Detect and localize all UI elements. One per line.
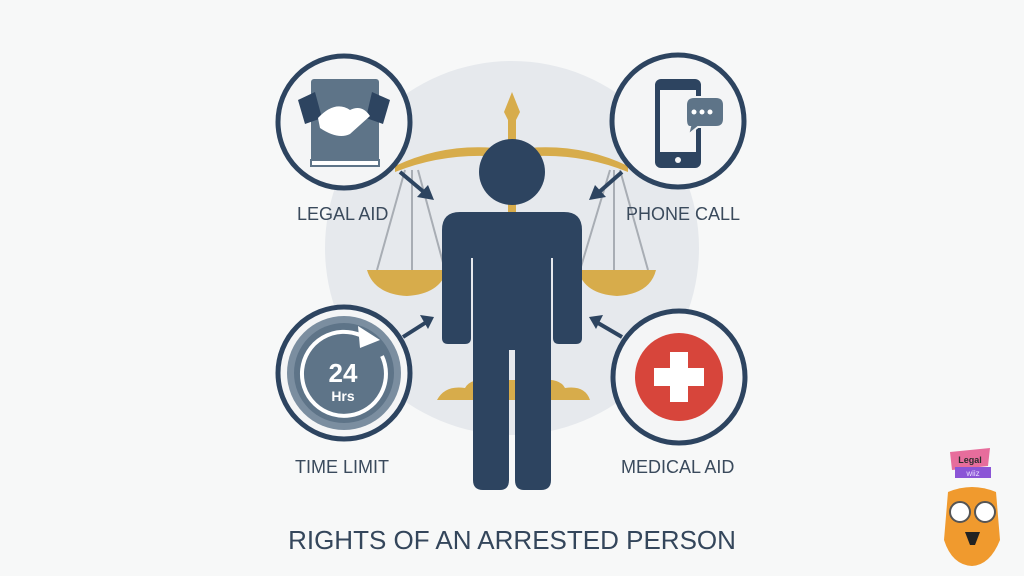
labels: PHONE CALL <box>626 204 740 224</box>
icon: medical aid <box>613 311 745 443</box>
icon: time limit: Hrs <box>331 388 355 404</box>
arrows <box>400 172 622 337</box>
icon: phone call <box>612 55 744 187</box>
labels: LEGAL AID <box>297 204 388 224</box>
logo: owl mascot <box>944 448 1000 566</box>
background circle <box>325 61 699 435</box>
labels <box>295 204 740 477</box>
logo: owl mascot: Legal <box>958 455 982 465</box>
icon: time limit <box>278 307 410 439</box>
labels: MEDICAL AID <box>621 457 734 477</box>
labels: TIME LIMIT <box>295 457 389 477</box>
title: RIGHTS OF AN ARRESTED PERSON <box>288 525 736 555</box>
logo: owl mascot: wiiz <box>965 469 980 478</box>
scales of justice <box>367 92 656 400</box>
person figure <box>442 139 582 490</box>
icon: time limit: 24 <box>329 358 358 388</box>
icon: legal aid <box>278 56 410 188</box>
